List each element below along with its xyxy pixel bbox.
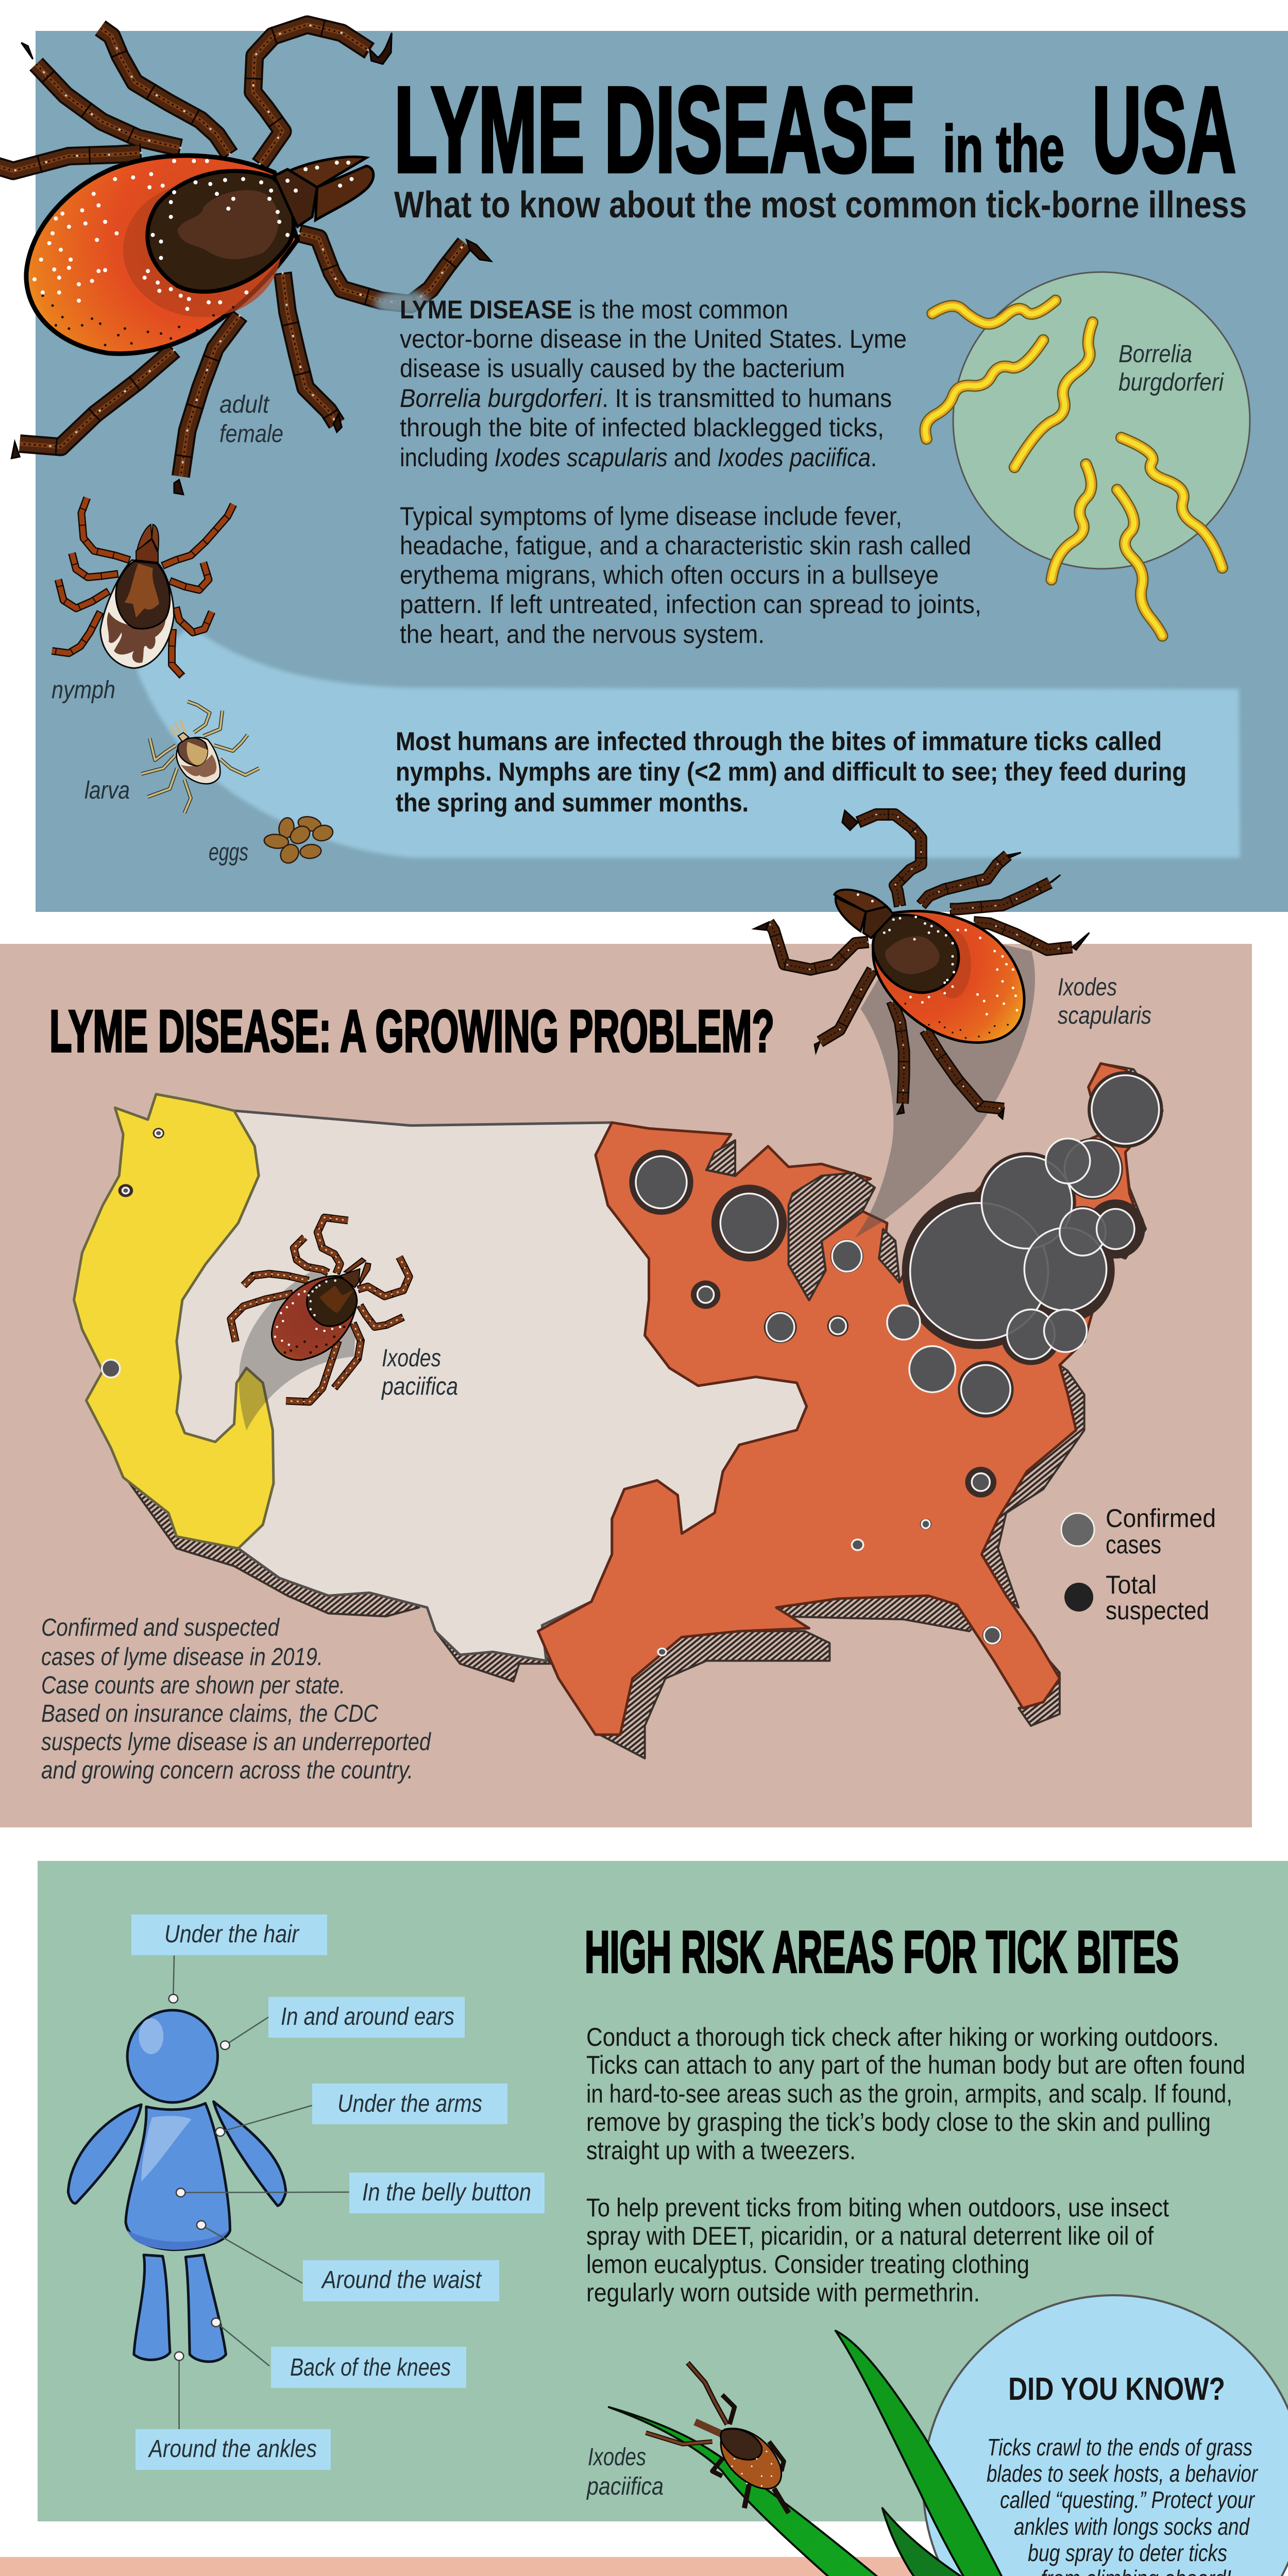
stage labels: larva [84, 777, 130, 804]
text block: prevention [586, 2193, 1169, 2307]
icon: ixodes pacifica tick [231, 1217, 409, 1402]
species labels: paciifica [381, 1373, 458, 1400]
text block: overview: LYME DISEASE is the most common [400, 295, 788, 324]
species labels: scapularis [1058, 1002, 1151, 1029]
label: knees: Back of the knees [290, 2354, 451, 2381]
stage labels: female [219, 420, 283, 448]
bubbles: suspected cases [101, 1071, 1163, 1656]
caption: Case counts are shown per state. [41, 1672, 345, 1699]
callout pins [169, 1994, 230, 2361]
text block: symptoms: pattern. If left untreated, infection can spread to joints, [400, 590, 981, 619]
caption: suspects lyme disease is an underreported [41, 1728, 431, 1756]
text block: symptoms [400, 502, 981, 649]
text block: symptoms: Typical symptoms of lyme disease include fever, [400, 502, 902, 531]
icon: ixodes scapularis tick [754, 810, 1089, 1119]
text block: nymph note [396, 727, 1187, 817]
caption [41, 1614, 431, 1784]
icon: borrelia bacteria [925, 272, 1250, 636]
figure: human body [68, 2010, 286, 2362]
text block: tick check: Conduct a thorough tick check after hiking or working outdoors. [586, 2023, 1219, 2052]
caption: and growing concern across the country. [41, 1757, 413, 1784]
icon: eggs [264, 815, 334, 867]
label: under the hair: Under the hair [164, 1921, 300, 1948]
text block: overview [400, 295, 907, 472]
map: great lakes hatching [706, 1140, 900, 1300]
text block: nymph note: the spring and summer months. [396, 788, 749, 817]
caption: Confirmed and suspected [41, 1614, 280, 1641]
legend: Total [1106, 1570, 1157, 1599]
label: knees [271, 2347, 466, 2388]
legend: cases [1106, 1530, 1161, 1559]
map shadow hatching [123, 1063, 1162, 1758]
label: waist [303, 2260, 499, 2301]
text block: symptoms: the heart, and the nervous system. [400, 620, 765, 649]
text block: tick check: straight up with a tweezers. [586, 2136, 856, 2165]
icon: nymph tick [52, 498, 233, 676]
species label: grass tick: Ixodes [588, 2444, 646, 2471]
callout lines [173, 1956, 349, 2429]
panel: high risk areas [38, 1861, 1288, 2521]
legend [1061, 1504, 1216, 1625]
label: ankles [135, 2429, 331, 2470]
callout: did you know: bug spray to deter ticks [1028, 2539, 1227, 2566]
map of USA [74, 1063, 1163, 1758]
label: arms [312, 2083, 507, 2124]
panel: quick facts [0, 2557, 1250, 2576]
icon: adult female tick [0, 25, 492, 495]
label: waist: Around the waist [320, 2266, 482, 2294]
caption: cases of lyme disease in 2019. [41, 1643, 323, 1671]
panel: intro [0, 25, 1288, 912]
icon: tick shadow pacifica [239, 1272, 356, 1430]
text block: tick check [586, 2023, 1245, 2165]
species label: grass tick [586, 2444, 664, 2500]
species labels: Ixodes [1058, 974, 1117, 1001]
label: ears: In and around ears [281, 2003, 454, 2030]
shadow: scapularis tick [855, 941, 1035, 1238]
text block: overview: including Ixodes scapularis and Ixodes paciifica. [400, 443, 877, 472]
stage labels: eggs [209, 839, 248, 866]
title: in the [943, 112, 1064, 186]
map: eastern region [538, 1063, 1162, 1735]
stage labels [52, 391, 283, 866]
panel: growing problem [0, 944, 1252, 1827]
label: ears [268, 1997, 465, 2038]
text block: overview: Borrelia burgdorferi. It is transmitted to humans [400, 384, 892, 413]
text block: nymph note: nymphs. Nymphs are tiny (<2 mm) and difficult to see; they feed during [396, 757, 1187, 786]
icon: borrelia bacteria: Borrelia [1118, 341, 1192, 368]
text block: nymph note: Most humans are infected through the bites of immature ticks called [396, 727, 1162, 756]
stage labels: adult [219, 391, 270, 418]
callout: did you know: DID YOU KNOW? [1008, 2371, 1225, 2407]
species label: grass tick: paciifica [586, 2473, 664, 2500]
legend: suspected [1106, 1596, 1209, 1625]
text block: prevention: lemon eucalyptus. Consider treating clothing [586, 2250, 1029, 2279]
text block: symptoms: headache, fatigue, and a characteristic skin rash called [400, 531, 971, 560]
map: central states [164, 1111, 807, 1661]
label: ankles: Around the ankles [147, 2435, 317, 2463]
icon: tick on grass [646, 2363, 789, 2513]
icon: borrelia bacteria: burgdorferi [1118, 369, 1224, 396]
band: nymph highlight [137, 626, 1240, 858]
text block: prevention: To help prevent ticks from biting when outdoors, use insect [586, 2193, 1169, 2222]
title: LYME DISEASE [394, 62, 916, 198]
icon: larva tick [141, 702, 259, 813]
text block: symptoms: erythema migrans, which often occurs in a bullseye [400, 561, 939, 589]
stage labels: nymph [52, 676, 115, 704]
text block: tick check: remove by grasping the tick’s body close to the skin and pulling [586, 2108, 1211, 2137]
label: arms: Under the arms [337, 2090, 482, 2117]
text block: overview: vector-borne disease in the United States. Lyme [400, 325, 907, 353]
caption: Based on insurance claims, the CDC [41, 1700, 378, 1727]
label: belly button [349, 2173, 545, 2213]
heading: LYME DISEASE: A GROWING PROBLEM? [49, 998, 774, 1064]
legend: Confirmed [1106, 1504, 1216, 1533]
species labels [381, 974, 1151, 1400]
text block: prevention: spray with DEET, picaridin, or a natural deterrent like oil of [586, 2222, 1154, 2250]
illustration: grass blades [609, 2331, 1219, 2576]
label: belly button: In the belly button [362, 2179, 531, 2206]
callout: did you know [923, 2295, 1288, 2576]
text block: overview: through the bite of infected blacklegged ticks, [400, 413, 884, 442]
text block: prevention: regularly worn outside with permethrin. [586, 2278, 980, 2307]
text block: overview: disease is usually caused by the bacterium [400, 354, 845, 383]
map: western region [74, 1094, 274, 1548]
species labels: Ixodes [382, 1345, 441, 1372]
bubbles: confirmed cases [102, 1075, 1159, 1655]
label: under the hair [131, 1914, 327, 1955]
